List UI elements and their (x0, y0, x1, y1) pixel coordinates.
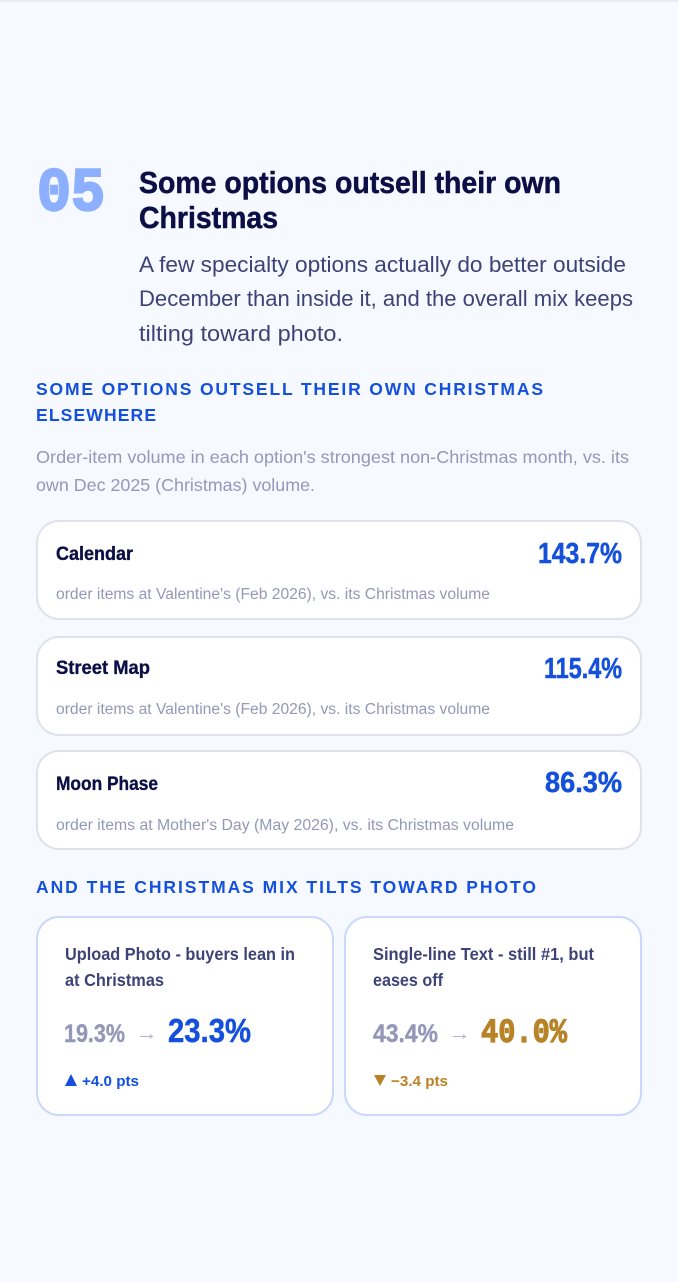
card heading: eases off (373, 970, 443, 990)
card: Street Map (37, 637, 641, 735)
previous share: 19.3% (64, 1020, 125, 1048)
card heading: Upload Photo - buyers lean in (65, 944, 295, 964)
title: Some options outsell their own (139, 165, 561, 200)
card: Calendar (37, 521, 641, 619)
caption: order items at Valentine's (Feb 2026), vs. its Christmas volume (56, 586, 490, 603)
title (139, 165, 561, 235)
section number: 05 (37, 160, 105, 229)
option name: Calendar (56, 544, 134, 565)
intro paragraph (139, 252, 633, 346)
intro paragraph: December than inside it, and the overall mix keeps (139, 286, 633, 311)
card heading: Single-line Text - still #1, but (373, 944, 594, 964)
change indicator: +4.0 pts (82, 1073, 139, 1090)
section description: own Dec 2025 (Christmas) volume. (36, 475, 315, 495)
option name: Street Map (56, 658, 150, 679)
card heading (65, 944, 295, 990)
option name: Moon Phase (56, 774, 158, 795)
value: 115.4% (544, 653, 622, 685)
header: section number and title (37, 160, 633, 346)
arrow (140, 1034, 152, 1038)
previous share: 43.4% (373, 1020, 438, 1048)
current share: 40.0% (481, 1015, 567, 1053)
caption: order items at Mother's Day (May 2026), vs. its Christmas volume (56, 817, 514, 834)
card: Upload Photo (37, 917, 333, 1115)
title: Christmas (139, 200, 278, 235)
section description (36, 447, 629, 495)
section heading: outsell elsewhere: ELSEWHERE (36, 405, 156, 425)
card heading: at Christmas (65, 970, 164, 990)
section heading: outsell elsewhere: SOME OPTIONS OUTSELL THEIR OWN CHRISTMAS (36, 379, 543, 399)
section description: Order-item volume in each option's strongest non-Christmas month, vs. its (36, 447, 629, 467)
current share: 23.3% (168, 1012, 251, 1049)
change indicator: −3.4 pts (391, 1073, 448, 1090)
value: 143.7% (538, 538, 622, 570)
card heading (373, 944, 594, 990)
intro paragraph: tilting toward photo. (139, 321, 343, 346)
arrow (453, 1034, 466, 1038)
section heading: mix tilts toward photo: AND THE CHRISTMAS MIX TILTS TOWARD PHOTO (36, 877, 536, 897)
card: Moon Phase (37, 751, 641, 849)
caption: order items at Valentine's (Feb 2026), vs. its Christmas volume (56, 701, 490, 718)
section heading: outsell elsewhere (36, 379, 543, 425)
card: Single-line Text (345, 917, 641, 1115)
value: 86.3% (545, 767, 622, 799)
intro paragraph: A few specialty options actually do better outside (139, 252, 626, 277)
